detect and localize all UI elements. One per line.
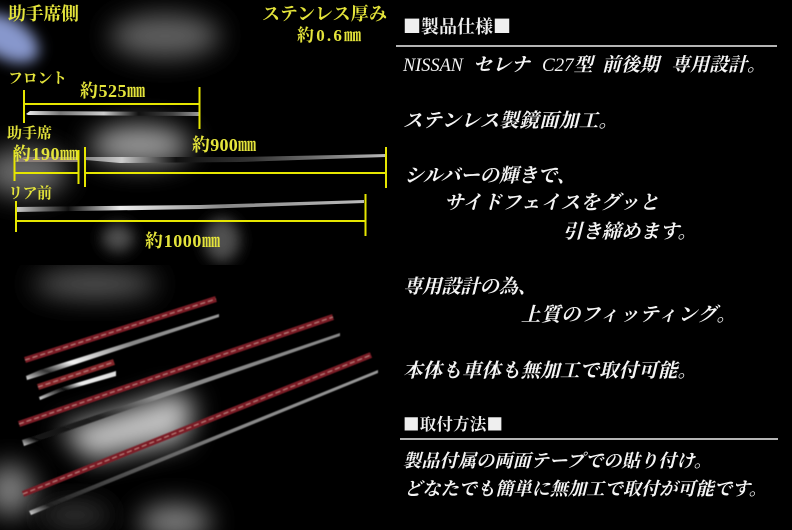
photo background glows (0, 270, 211, 530)
rod: rear front 1000mm (16, 200, 364, 212)
dimension labels: 助手席側 (8, 4, 79, 24)
photo background glows (0, 3, 240, 262)
spec divider (396, 45, 777, 47)
spec text: 専用設計。 (671, 54, 766, 76)
install text: どなたでも簡単に無加工で取付が可能です。 (404, 479, 767, 499)
dimension labels: 約900㎜ (192, 135, 257, 155)
spec text (402, 54, 766, 382)
heading: installation: ■取付方法■ (403, 411, 503, 435)
dimension labels: 助手席 (7, 124, 52, 142)
dimension labels (7, 4, 387, 251)
spec text: 専用設計の為、 (403, 276, 537, 298)
install text: 製品付属の両面テープでの貼り付け。 (403, 451, 712, 471)
rod: passenger 900mm (86, 154, 386, 163)
dimension labels: 約0.6㎜ (297, 26, 362, 45)
spec text: サイドフェイスをグッと (444, 192, 659, 214)
spec text: 前後期 (602, 54, 662, 76)
dimension labels: 約525㎜ (80, 81, 146, 101)
dimension labels: フロント (8, 71, 67, 87)
spec text: ステンレス製鏡面加工。 (403, 110, 618, 132)
heading: product spec: ■製品仕様■ (403, 13, 511, 39)
red tape rods (19, 299, 371, 494)
spec text: シルバーの輝きで、 (404, 165, 576, 187)
dimension labels: 約1000㎜ (145, 231, 221, 251)
install divider (400, 438, 778, 440)
panel: product specifications (396, 13, 777, 382)
rod: passenger 190mm (15, 157, 78, 162)
dimension labels: 約190㎜ (13, 144, 79, 164)
spec text: 引き締めます。 (563, 221, 697, 243)
install text (403, 451, 767, 499)
panel: installation method (400, 411, 778, 499)
spec text: 上質のフィッティング。 (521, 304, 736, 326)
rod: front 525mm (26, 111, 199, 116)
spec text: セレナ (473, 55, 532, 76)
spec text: C27型 (542, 54, 596, 76)
dimension labels: リア前 (8, 184, 52, 202)
spec text: NISSAN (402, 55, 464, 76)
dimension lines (14, 87, 386, 236)
spec text: 本体も車体も無加工で取付可能。 (403, 360, 697, 382)
panel: product photo (0, 270, 378, 530)
panel: dimension photo (0, 3, 387, 262)
dimension labels: ステンレス厚み (262, 4, 387, 24)
silver rods (22, 314, 378, 515)
